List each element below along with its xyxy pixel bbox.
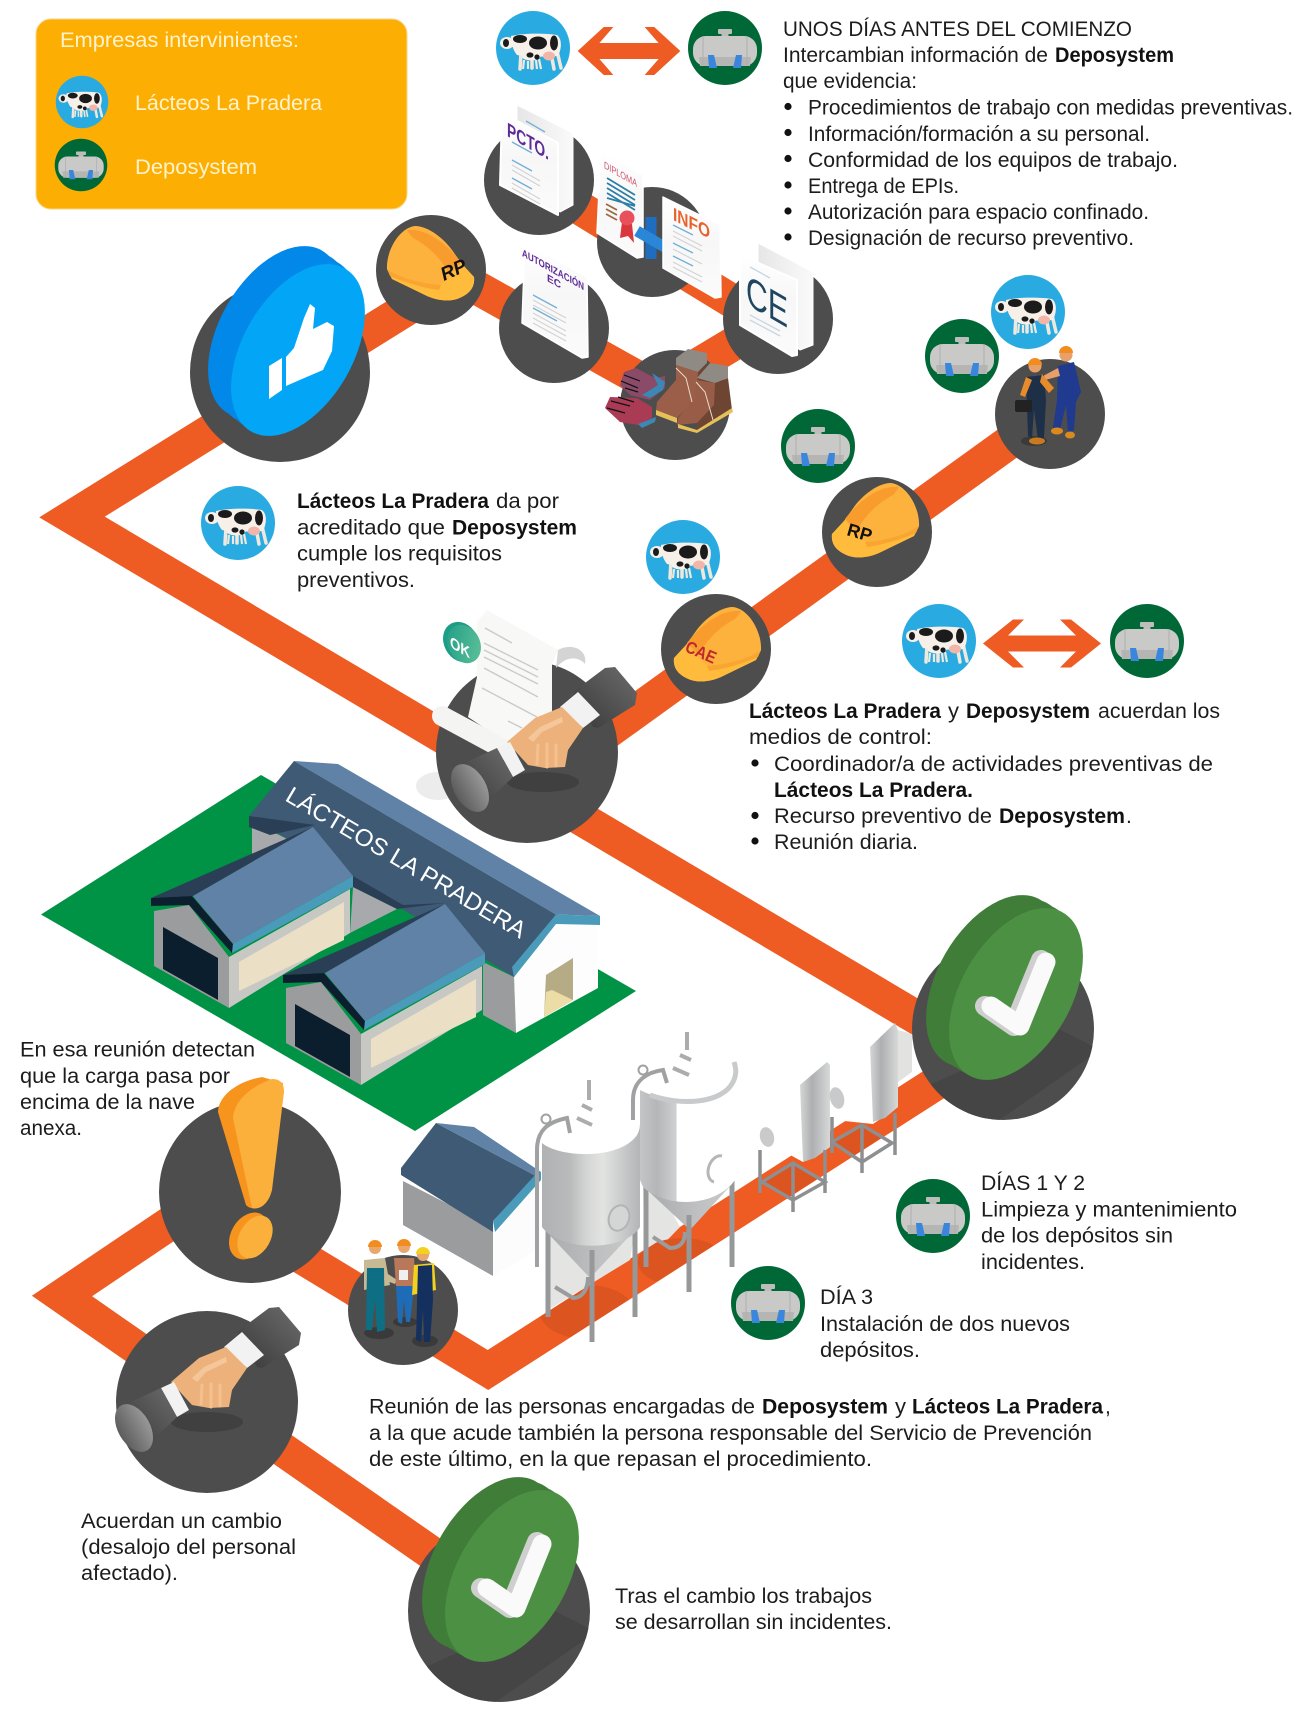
legend panel — [36, 19, 407, 209]
boot front — [676, 363, 733, 433]
factory on green lot — [41, 761, 636, 1131]
person right — [412, 1247, 436, 1342]
text block: medios de control: Coordinador/a de actividades preventivas de — [774, 753, 1213, 776]
text block: días 1 y 2: Limpieza y mantenimiento — [981, 1198, 1237, 1222]
text block: unos días antes: Procedimientos de trabajo con medidas preventivas. — [808, 96, 1293, 120]
legend label: Lácteos La Pradera: Lácteos La Pradera — [135, 92, 322, 115]
text block: días 1 y 2: incidentes. — [981, 1251, 1085, 1274]
text block: unos días antes: que evidencia: — [783, 70, 917, 93]
text block: medios de control: acuerdan los — [1098, 700, 1220, 723]
text block: medios de control: Deposystem — [966, 700, 1090, 723]
node: autorización document: AUTORIZACIÓN — [522, 247, 584, 293]
icon: tank — [55, 139, 107, 191]
node: handshake 2 — [107, 1307, 301, 1493]
text block: acreditado — [297, 490, 577, 592]
node: hard hat RP 2 — [822, 477, 932, 587]
node: CE document: CE — [746, 265, 788, 338]
text block: reunión: Reunión de las personas encargadas de — [369, 1396, 755, 1418]
icon: cow by workers — [991, 275, 1065, 349]
node: CE document — [723, 243, 833, 374]
text block: acuerdan — [81, 1510, 296, 1585]
stand 1 — [760, 1150, 825, 1212]
gloves — [605, 368, 665, 428]
text block: unos días antes: Entrega de EPIs. — [808, 175, 959, 198]
text block: día 3: Instalación de dos nuevos — [820, 1313, 1070, 1336]
icon: cow above CAE — [646, 520, 720, 594]
text block: reunión: y — [895, 1396, 907, 1418]
node: hard hat CAE — [661, 594, 771, 704]
text block: acreditado: preventivos. — [297, 569, 415, 592]
node: exclamation warning — [159, 1077, 341, 1283]
text block: acuerdan: Acuerdan un cambio — [81, 1510, 282, 1533]
text block: medios de control: Reunión diaria. — [774, 831, 918, 854]
boot back — [656, 349, 708, 423]
text block: unos días antes: Designación de recurso preventivo. — [808, 227, 1134, 250]
text block: días 1 y 2 — [981, 1172, 1237, 1274]
text block: reunión: Deposystem — [762, 1396, 888, 1418]
process path band — [62, 208, 1040, 1600]
icon: tank días 1 y 2 — [896, 1179, 970, 1253]
node: green check 2 — [408, 1477, 590, 1702]
node: diploma and info documents — [597, 150, 721, 298]
node: hard hat CAE: CAE — [682, 637, 719, 668]
person left — [364, 1240, 397, 1332]
scroll document — [442, 610, 585, 750]
text block: días 1 y 2: de los depósitos sin — [981, 1224, 1173, 1248]
node: autorización document: EC — [547, 273, 561, 292]
node: hard hat RP: RP — [437, 256, 470, 286]
text block: unos días antes: Información/formación a su personal. — [808, 123, 1150, 146]
factory name on roof: LÁCTEOS LA PRADERA — [281, 782, 531, 944]
tank A — [537, 1080, 640, 1342]
text block: tras el cambio — [615, 1585, 892, 1634]
exchange icons: top — [496, 11, 762, 85]
node: hard hat RP — [376, 215, 486, 325]
text block: detectan: que la carga pasa por — [20, 1065, 230, 1088]
node: autorización document — [499, 242, 609, 383]
person middle — [394, 1239, 416, 1324]
text block: unos días antes: Deposystem — [1055, 44, 1174, 67]
node: handshake with signed document — [416, 610, 637, 843]
node: hard hat RP 2: RP — [845, 520, 874, 546]
node: boots and gloves — [605, 349, 733, 460]
factory wing 1 — [151, 827, 353, 1008]
icon: cow, accreditation — [201, 486, 275, 560]
legend heading: Empresas intervinientes: — [60, 29, 299, 52]
node: PCTO document — [484, 105, 594, 235]
icon: cow — [56, 76, 108, 128]
tank D — [835, 1012, 898, 1124]
node: thumbs up — [180, 223, 393, 462]
node: PCTO document: PCTO. — [507, 117, 549, 165]
node: diploma and info documents: DIPLOMA — [604, 160, 638, 190]
text block: día 3 — [820, 1286, 1070, 1362]
icon: tank above RP — [781, 409, 855, 483]
text block: acreditado: cumple los requisitos — [297, 542, 502, 566]
text block: medios de control — [749, 700, 1220, 854]
text block: acreditado: Deposystem — [452, 516, 577, 540]
text block: unos días antes — [783, 18, 1293, 250]
OK badge — [436, 615, 488, 669]
text block: acreditado: acreditado que — [297, 516, 445, 540]
text block: medios de control: Deposystem — [999, 805, 1125, 828]
icon: tank día 3 — [731, 1266, 805, 1340]
text block: reunión: de este último, en la que repasan el procedimiento. — [369, 1448, 872, 1471]
text block: reunión: a la que acude también la persona responsable del Servicio de Prevención — [369, 1422, 1092, 1445]
text block: detectan: anexa. — [20, 1117, 82, 1140]
exchange icons: control measures — [902, 604, 1184, 678]
text block: medios de control: Recurso preventivo de — [774, 805, 992, 828]
factory main hall — [249, 761, 600, 1033]
text block: unos días antes: Autorización para espacio confinado. — [808, 201, 1149, 224]
node: meeting of three people — [348, 1239, 458, 1365]
text block: medios de control: Lácteos La Pradera. — [774, 779, 973, 802]
text block: acuerdan: (desalojo del personal — [81, 1536, 296, 1559]
text block: medios de control: y — [948, 700, 960, 723]
tank B — [633, 1032, 736, 1292]
legend label: Deposystem: Deposystem — [135, 156, 257, 179]
worker right — [1043, 346, 1081, 438]
text block: unos días antes: Intercambian información de — [783, 44, 1048, 67]
text block: medios de control: Lácteos La Pradera — [749, 700, 941, 723]
text block: unos días antes: Conformidad de los equipos de trabajo. — [808, 149, 1178, 172]
text block: reunión: Lácteos La Pradera — [912, 1396, 1103, 1418]
stand 2 — [832, 1113, 895, 1173]
node: diploma and info documents: INFO — [673, 204, 710, 244]
text block: medios de control: medios de control: — [749, 726, 932, 749]
text block: reunión — [369, 1396, 1111, 1471]
text block: medios de control: . — [1126, 805, 1132, 828]
text block: detectan: encima de la nave — [20, 1091, 195, 1114]
text block: tras el cambio: se desarrollan sin incidentes. — [615, 1611, 892, 1634]
text block: día 3: depósitos. — [820, 1339, 920, 1362]
node: green check 1 — [912, 895, 1094, 1120]
text block: reunión: , — [1105, 1396, 1111, 1418]
text block: unos días antes: UNOS DÍAS ANTES DEL COMIENZO — [783, 18, 1132, 41]
OK badge: OK — [450, 632, 470, 662]
text block: tras el cambio: Tras el cambio los trabajos — [615, 1585, 872, 1608]
text block: día 3: DÍA 3 — [820, 1286, 873, 1309]
text block: acreditado: Lácteos La Pradera — [297, 490, 489, 513]
tank pad and shadows — [540, 1030, 912, 1339]
text block: acreditado: da por — [496, 490, 559, 513]
text block: detectan: En esa reunión detectan — [20, 1038, 255, 1062]
small annex building — [401, 1123, 541, 1276]
text block: días 1 y 2: DÍAS 1 Y 2 — [981, 1172, 1085, 1195]
node: two workers — [995, 346, 1105, 469]
tanks and stands on the band — [537, 1012, 912, 1342]
text block: detectan — [20, 1038, 255, 1140]
worker left — [1015, 358, 1054, 444]
text block: acuerdan: afectado). — [81, 1562, 178, 1585]
tank C — [758, 1050, 847, 1162]
icon: tank by workers — [925, 319, 999, 393]
factory wing 2 — [283, 904, 485, 1085]
